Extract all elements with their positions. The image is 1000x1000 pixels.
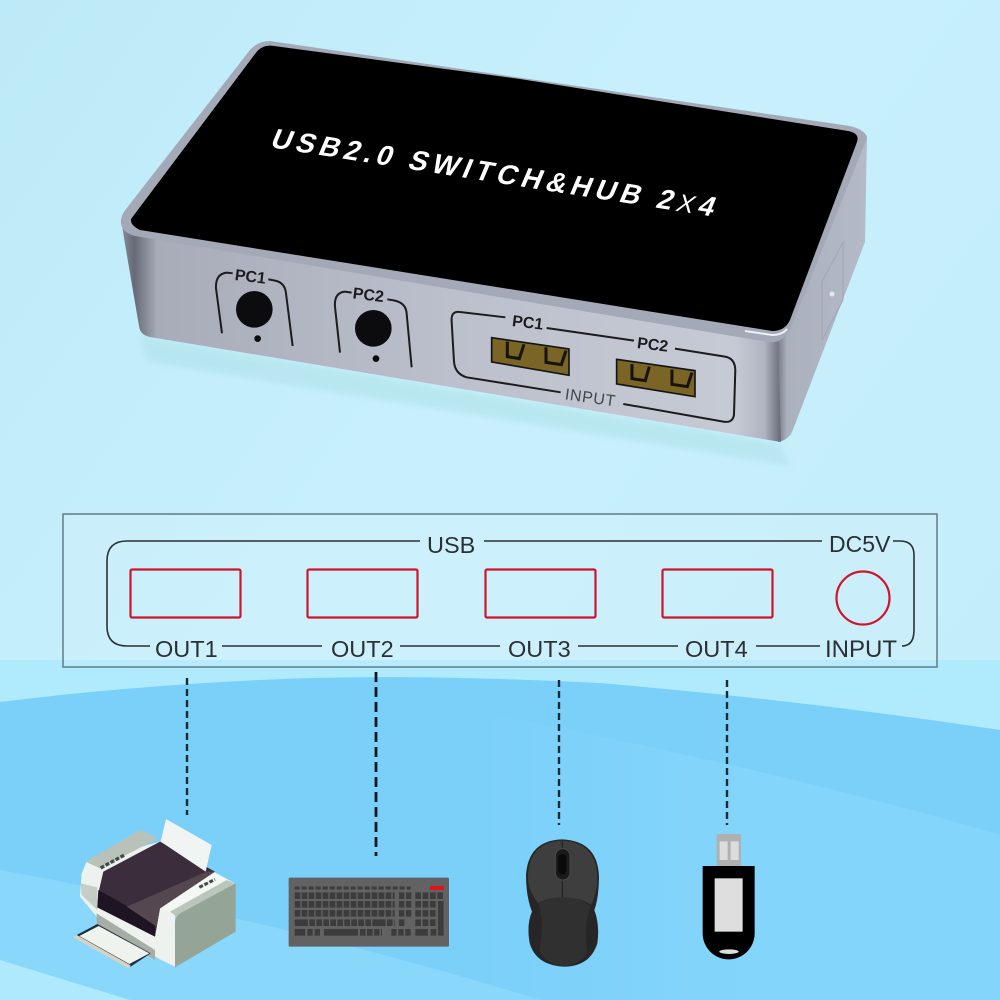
label USB: USB	[427, 532, 475, 558]
button PC2: PC2	[352, 285, 385, 306]
icon: usb flash drive	[703, 834, 755, 959]
device title: USB2.0 SWITCH&HUB 2X4	[266, 124, 726, 224]
panel frame	[63, 514, 937, 667]
device front face	[121, 218, 781, 442]
button PC2	[335, 285, 412, 367]
port OUT1	[130, 570, 240, 618]
icon: keyboard	[289, 878, 449, 947]
label OUT1: OUT1	[155, 636, 218, 662]
connector OUT4	[726, 680, 728, 825]
label OUT2: OUT2	[331, 636, 394, 662]
label INPUT: INPUT	[825, 636, 897, 663]
port OUT4	[662, 570, 772, 618]
input port group	[452, 312, 735, 422]
icon: mouse	[526, 839, 599, 967]
icon: printer	[73, 819, 236, 968]
device right side	[776, 135, 867, 442]
device rim	[121, 41, 867, 342]
port DC input	[836, 572, 890, 624]
button PC1: PC1	[234, 267, 267, 288]
connector OUT3	[558, 680, 560, 825]
label OUT3: OUT3	[508, 636, 571, 662]
device top face	[131, 46, 858, 331]
connector OUT1	[186, 678, 188, 815]
port OUT2	[308, 570, 418, 618]
side detail	[822, 242, 843, 340]
label OUT4: OUT4	[685, 636, 748, 662]
device: USB switch	[121, 41, 867, 442]
port OUT3	[486, 570, 596, 618]
panel: port diagram	[63, 514, 937, 667]
input port group: PC1	[511, 313, 544, 334]
label DC5V: DC5V	[829, 531, 891, 557]
input port group: INPUT	[564, 386, 617, 410]
button PC1	[216, 267, 293, 346]
port PC1	[492, 338, 569, 375]
connector OUT2	[375, 672, 377, 856]
device shadow	[140, 336, 790, 466]
input port group: PC2	[636, 335, 669, 356]
bracket outline	[107, 541, 914, 646]
port PC2	[617, 359, 695, 397]
